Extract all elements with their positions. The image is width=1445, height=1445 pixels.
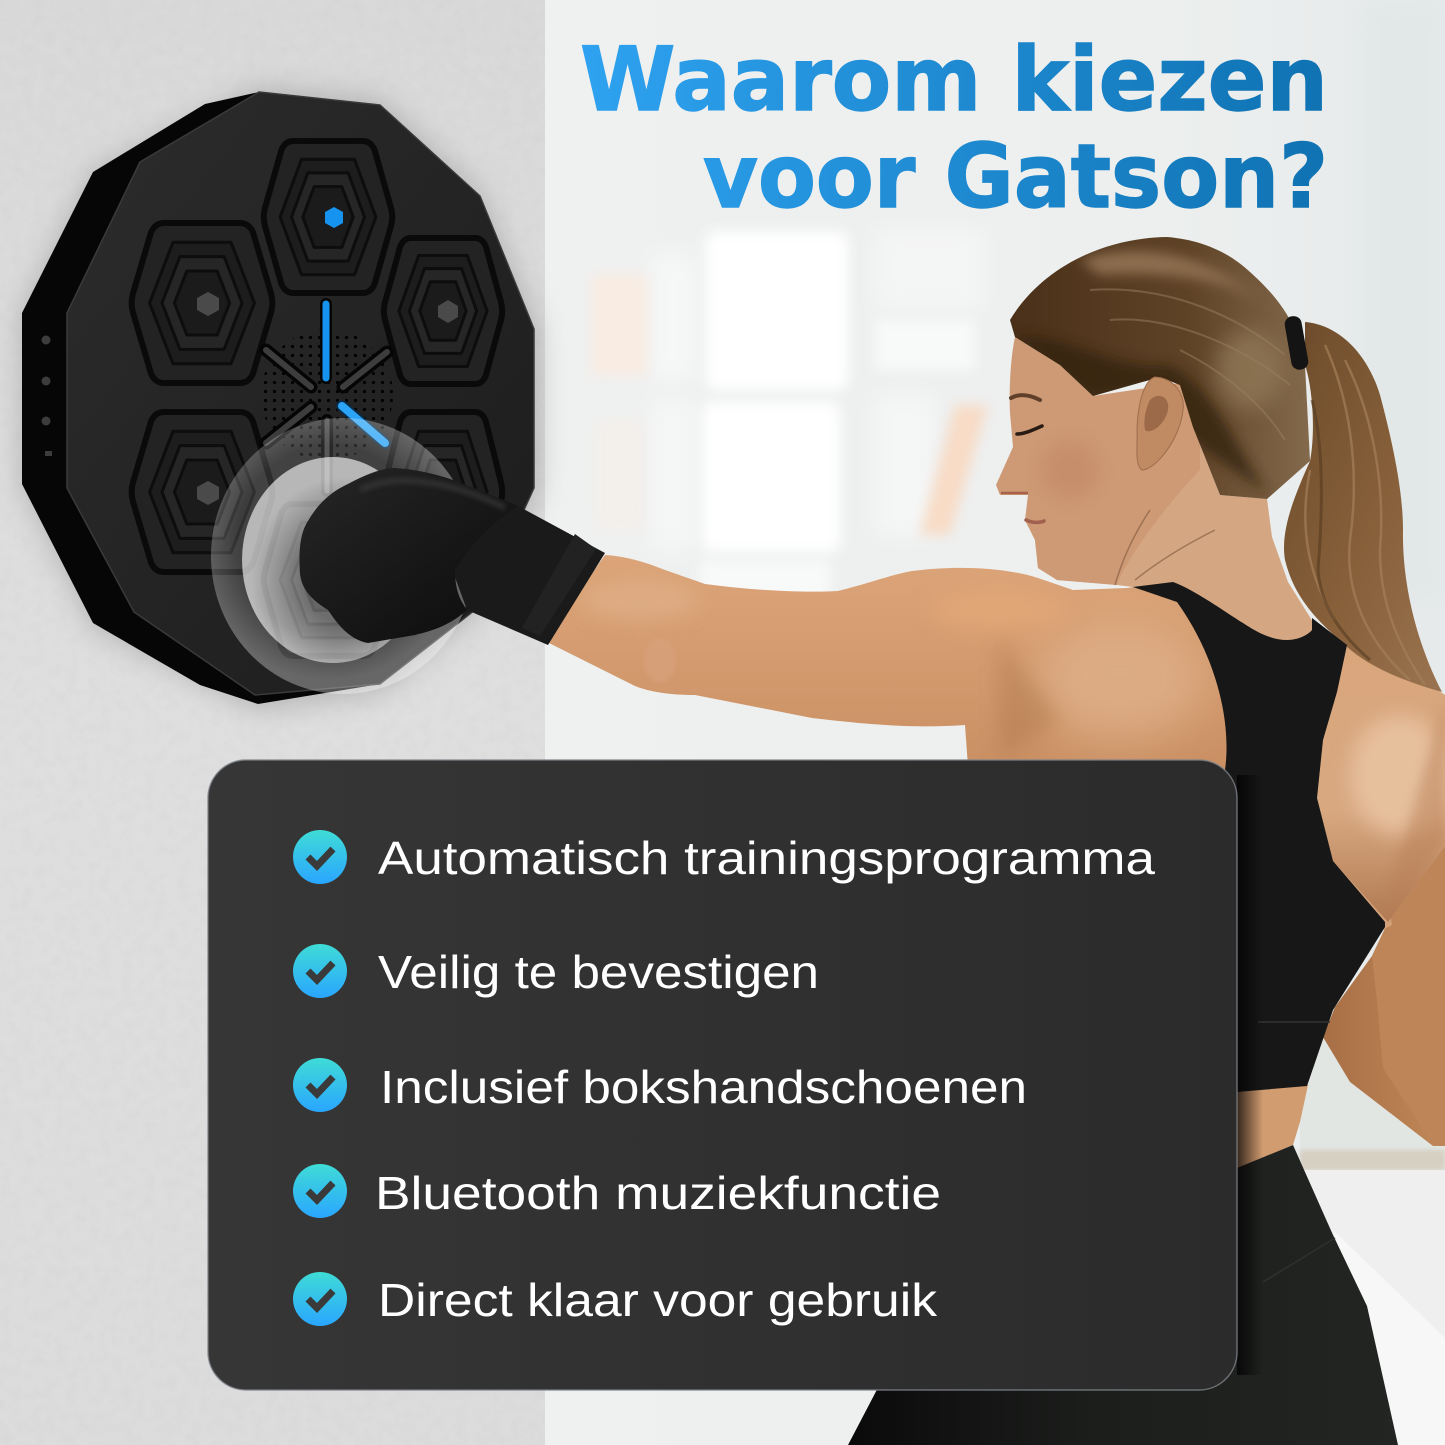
target pad: right [384, 238, 502, 384]
glove fist [299, 468, 518, 643]
hairline shadow [1015, 336, 1270, 495]
background: white table [1290, 1170, 1445, 1445]
woman: bra band seam [1258, 1021, 1330, 1023]
woman: sports bra [1133, 582, 1385, 1093]
woman: back arm [1323, 846, 1445, 1146]
woman: neck [1025, 400, 1318, 650]
feature: safe mounting [293, 944, 819, 998]
cheek blush [1040, 440, 1100, 500]
feature: ready to use [293, 1272, 938, 1326]
woman: facial features [1001, 395, 1100, 522]
icon: check [293, 830, 347, 884]
icon: check [293, 944, 347, 998]
feature: automatic training [293, 830, 1155, 884]
eye [1017, 426, 1042, 434]
background: blurred gym room [545, 0, 1445, 1445]
hair sheen [1216, 330, 1284, 410]
feature: bluetooth music [293, 1164, 941, 1219]
target pad: top [264, 141, 392, 293]
device: wall-mounted boxing machine [22, 88, 538, 710]
woman: midriff [1220, 1085, 1308, 1175]
label: Veilig te bevestigen [378, 946, 819, 998]
eyebrow [1011, 395, 1040, 400]
icon: check [293, 1164, 347, 1218]
feature: gloves included [293, 1058, 1027, 1113]
label: Bluetooth muziekfunctie [375, 1167, 941, 1219]
lips [1026, 520, 1044, 522]
title line 2: voor Gatson? [703, 125, 1328, 228]
device shadow [22, 88, 538, 710]
glove cuff [445, 506, 605, 645]
nose shadow [1001, 492, 1028, 494]
woman: torso underlay [1133, 585, 1392, 1010]
side buttons [42, 336, 52, 456]
boxing glove [299, 468, 605, 645]
woman: face [996, 337, 1200, 585]
woman: leggings [848, 1145, 1398, 1445]
target pad: lower right [384, 412, 502, 572]
title [580, 28, 1328, 228]
woman: back shoulder skin [1330, 646, 1445, 922]
label: Direct klaar voor gebruik [378, 1274, 938, 1326]
icon: check [293, 1272, 347, 1326]
hair highlight [1080, 246, 1244, 292]
icon: check [293, 1058, 347, 1112]
target pad: left [132, 223, 272, 383]
target pad: lower left [132, 412, 272, 572]
glove highlight [360, 481, 505, 508]
woman: hair [1010, 237, 1310, 499]
hair strands [1090, 289, 1290, 440]
panel background [208, 760, 1237, 1390]
glove cuff band [522, 534, 596, 636]
background: left wall [0, 0, 545, 1445]
speaker grille [261, 329, 393, 461]
arm shading [580, 580, 1205, 760]
label: Automatisch trainingsprogramma [378, 832, 1155, 884]
panel shadow on figure [1237, 775, 1263, 1375]
label: Inclusief bokshandschoenen [380, 1061, 1027, 1113]
background: lower-right wall strip [1300, 1030, 1445, 1170]
light spokes [266, 304, 387, 491]
device face [67, 92, 534, 695]
woman: arm and shoulder [549, 555, 1226, 769]
woman boxer [545, 237, 1445, 1445]
device body [22, 92, 380, 704]
woman: ear [1137, 377, 1183, 470]
target pad: bottom [264, 504, 392, 656]
woman: neck crease [1115, 510, 1215, 585]
woman: ponytail [1284, 322, 1442, 692]
woman: hair tie [1283, 315, 1310, 371]
woman: leggings waistband seam [1263, 1238, 1335, 1282]
panel: feature list [208, 760, 1263, 1390]
impact rings [211, 418, 475, 694]
title line 1: Waarom kiezen [580, 28, 1328, 131]
